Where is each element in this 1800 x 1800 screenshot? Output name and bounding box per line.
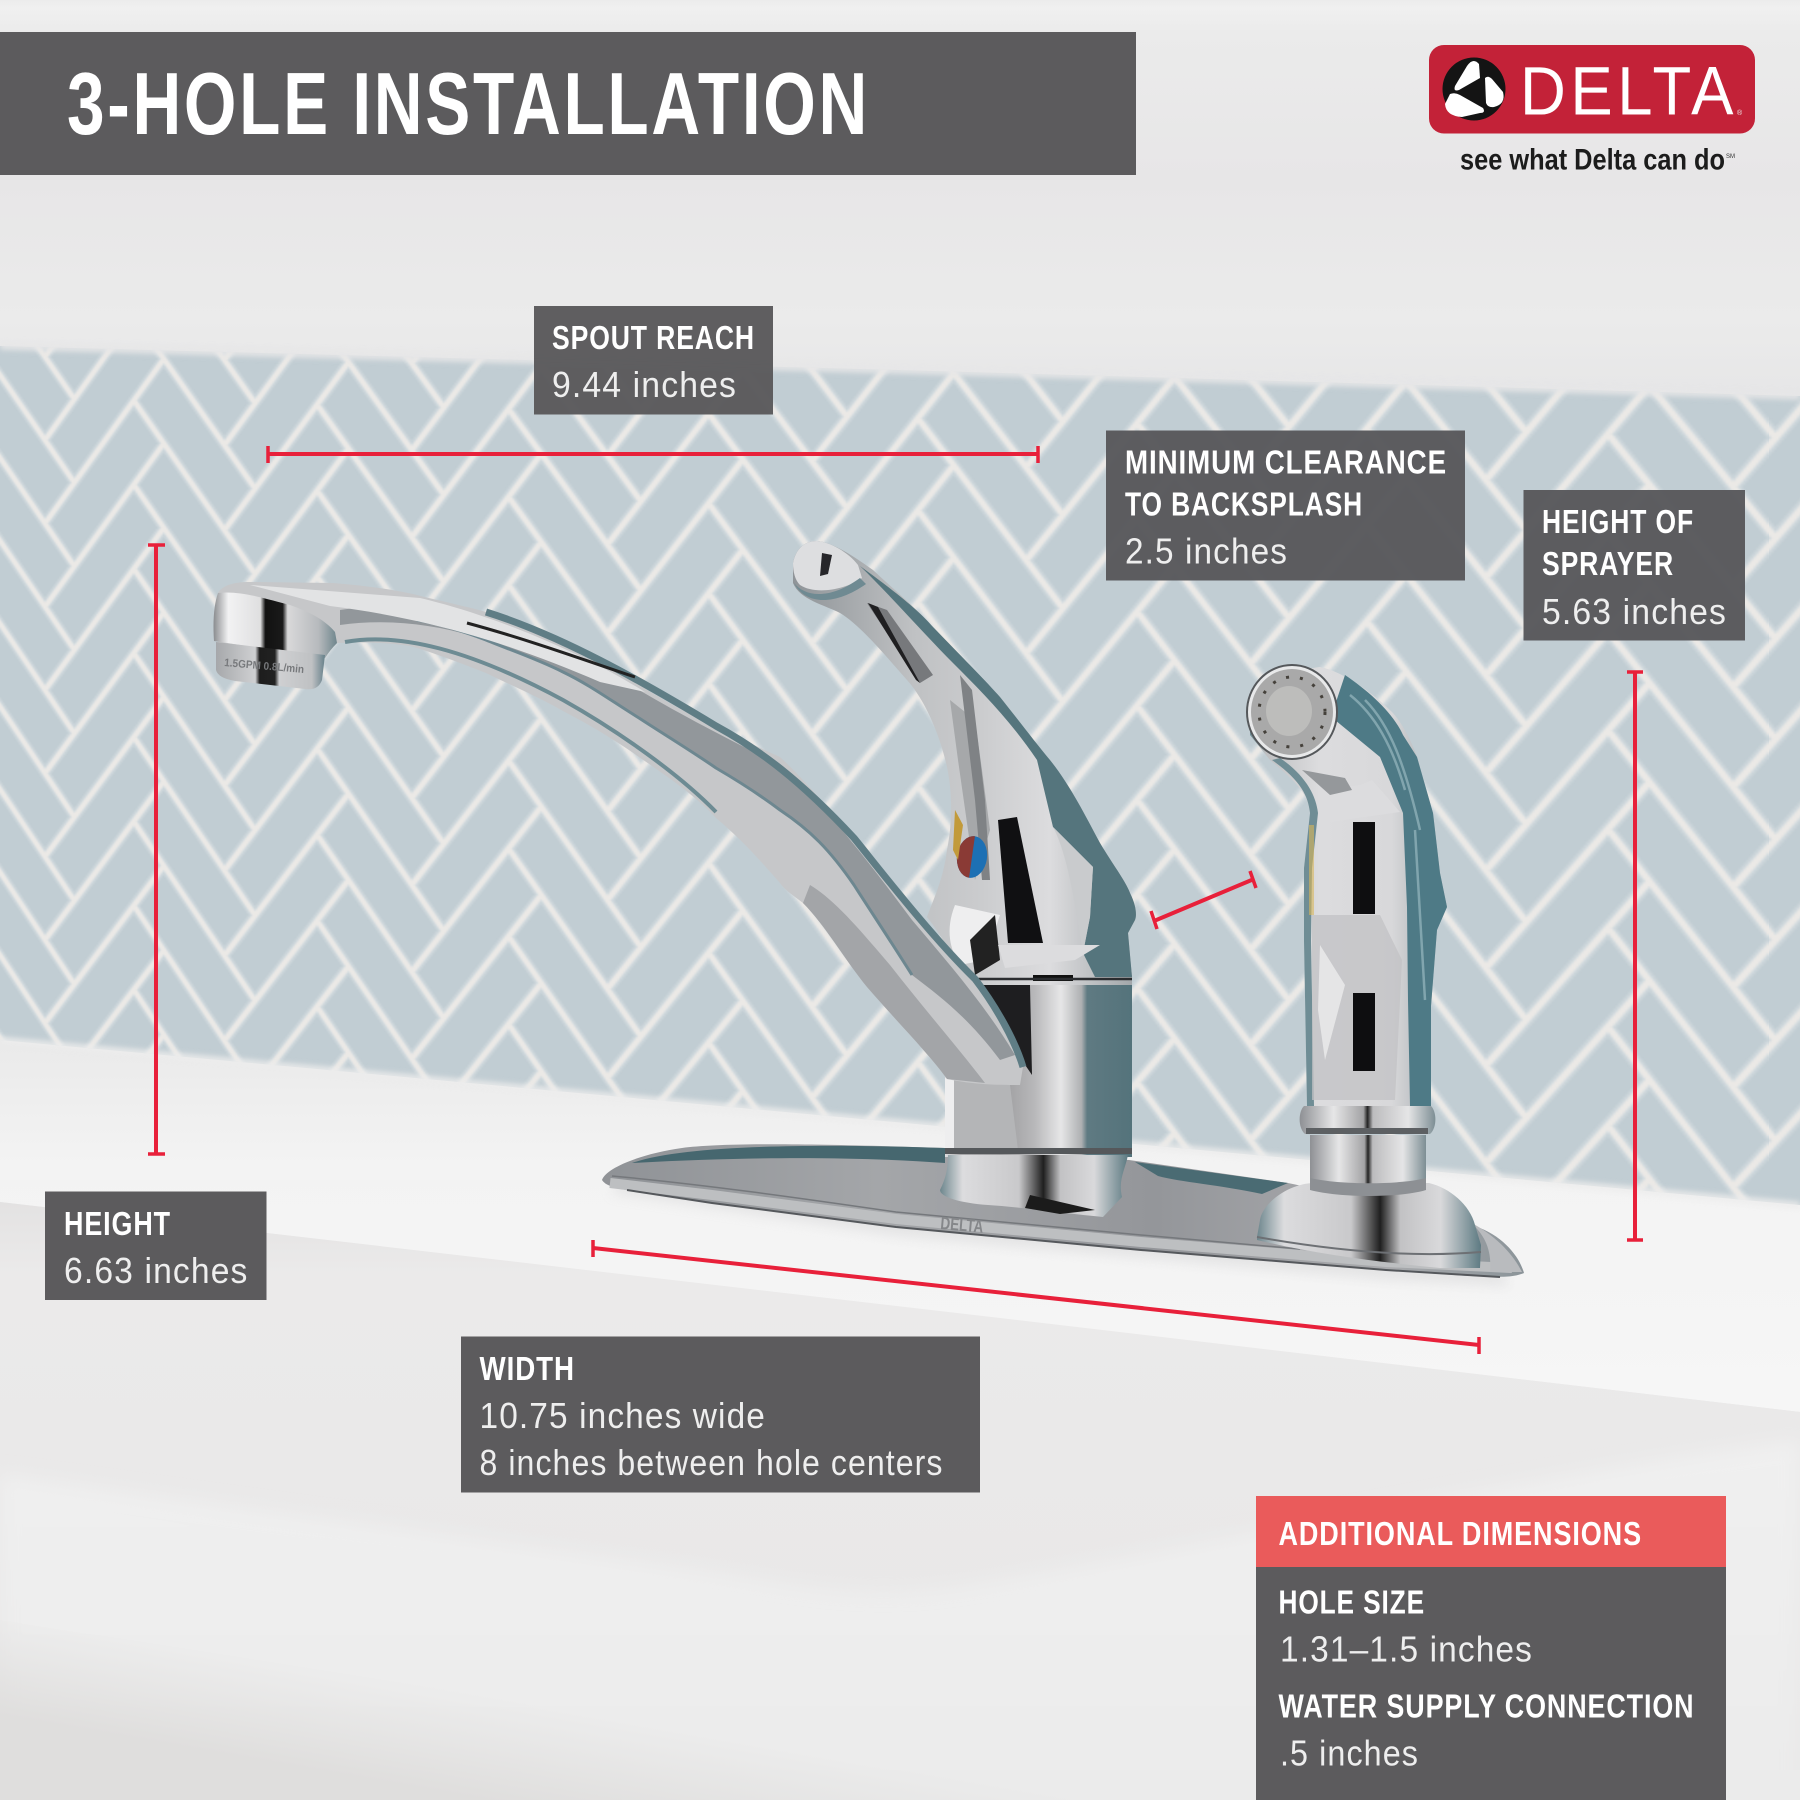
Delta logo <box>1429 45 1755 176</box>
callout: width <box>461 1336 980 1492</box>
sprayer dome base <box>1257 1183 1481 1268</box>
sprayer spray face <box>1247 665 1337 759</box>
callout: height: 6.63 inches <box>64 1250 248 1291</box>
deck plate <box>602 1144 1524 1286</box>
Delta logo: DELTA <box>1520 52 1738 130</box>
callout: minimum clearance: TO BACKSPLASH <box>1125 486 1363 522</box>
dimension line: height <box>148 545 165 1154</box>
callout: height: HEIGHT <box>64 1205 171 1242</box>
Delta logo: ® <box>1737 109 1743 117</box>
spout <box>214 582 1023 1085</box>
lever reflections <box>950 700 990 880</box>
callout: minimum clearance: MINIMUM CLEARANCE <box>1125 444 1447 480</box>
callout: width: 10.75 inches wide <box>480 1395 766 1436</box>
dimension line: spout reach <box>268 446 1038 463</box>
logo mark <box>1442 58 1506 120</box>
title banner: 3-HOLE INSTALLATION <box>67 54 870 153</box>
hot and cold indicator <box>954 834 990 880</box>
panel body: WATER SUPPLY CONNECTION <box>1278 1688 1694 1724</box>
sprayer ring <box>1300 1106 1435 1134</box>
callout: spout reach <box>534 306 773 414</box>
spout: 1.5GPM 0.8L/min <box>224 657 305 676</box>
lever slot <box>867 603 933 683</box>
lever handle <box>793 541 1136 985</box>
panel body: 1.31–1.5 inches <box>1280 1628 1533 1670</box>
callout: height of sprayer: HEIGHT OF <box>1542 503 1694 540</box>
callout: spout reach: SPOUT REACH <box>552 319 755 356</box>
tagline: see what Delta can do <box>1460 144 1725 176</box>
dimension line: width <box>593 1240 1479 1354</box>
title banner <box>0 32 1136 175</box>
panel header: ADDITIONAL DIMENSIONS <box>1278 1515 1642 1552</box>
callout: width: WIDTH <box>480 1350 575 1387</box>
sprayer body <box>1250 667 1447 1106</box>
aerator ring <box>216 642 325 689</box>
lever tip <box>793 541 862 590</box>
panel header <box>1256 1496 1726 1567</box>
sprayer neck <box>1310 1135 1426 1185</box>
backsplash: herringbone tile wall <box>0 346 1800 1205</box>
faucet column <box>940 975 1132 1217</box>
panel body <box>1256 1567 1726 1800</box>
callout: minimum clearance <box>1106 430 1465 580</box>
panel body: .5 inches <box>1280 1732 1419 1774</box>
panel: additional dimensions <box>1256 1496 1726 1800</box>
Delta logo: SM <box>1726 154 1735 160</box>
callout: height <box>45 1192 266 1300</box>
spout upper band <box>340 600 1015 1060</box>
callout: width: 8 inches between hole centers <box>480 1442 944 1483</box>
faucet base flare <box>940 1155 1128 1217</box>
sprayer <box>1247 665 1481 1268</box>
callout: height of sprayer: 5.63 inches <box>1542 591 1727 632</box>
aerator head <box>214 592 337 658</box>
plate logo: DELTA <box>940 1213 984 1237</box>
callout: minimum clearance: 2.5 inches <box>1125 530 1288 572</box>
callout: spout reach: 9.44 inches <box>552 364 737 405</box>
dimension line: clearance to backsplash <box>1151 871 1256 929</box>
callout: height of sprayer: SPRAYER <box>1542 545 1674 582</box>
callout: height of sprayer <box>1524 490 1745 640</box>
dimension line: sprayer height <box>1627 672 1643 1240</box>
panel body: HOLE SIZE <box>1278 1584 1425 1620</box>
